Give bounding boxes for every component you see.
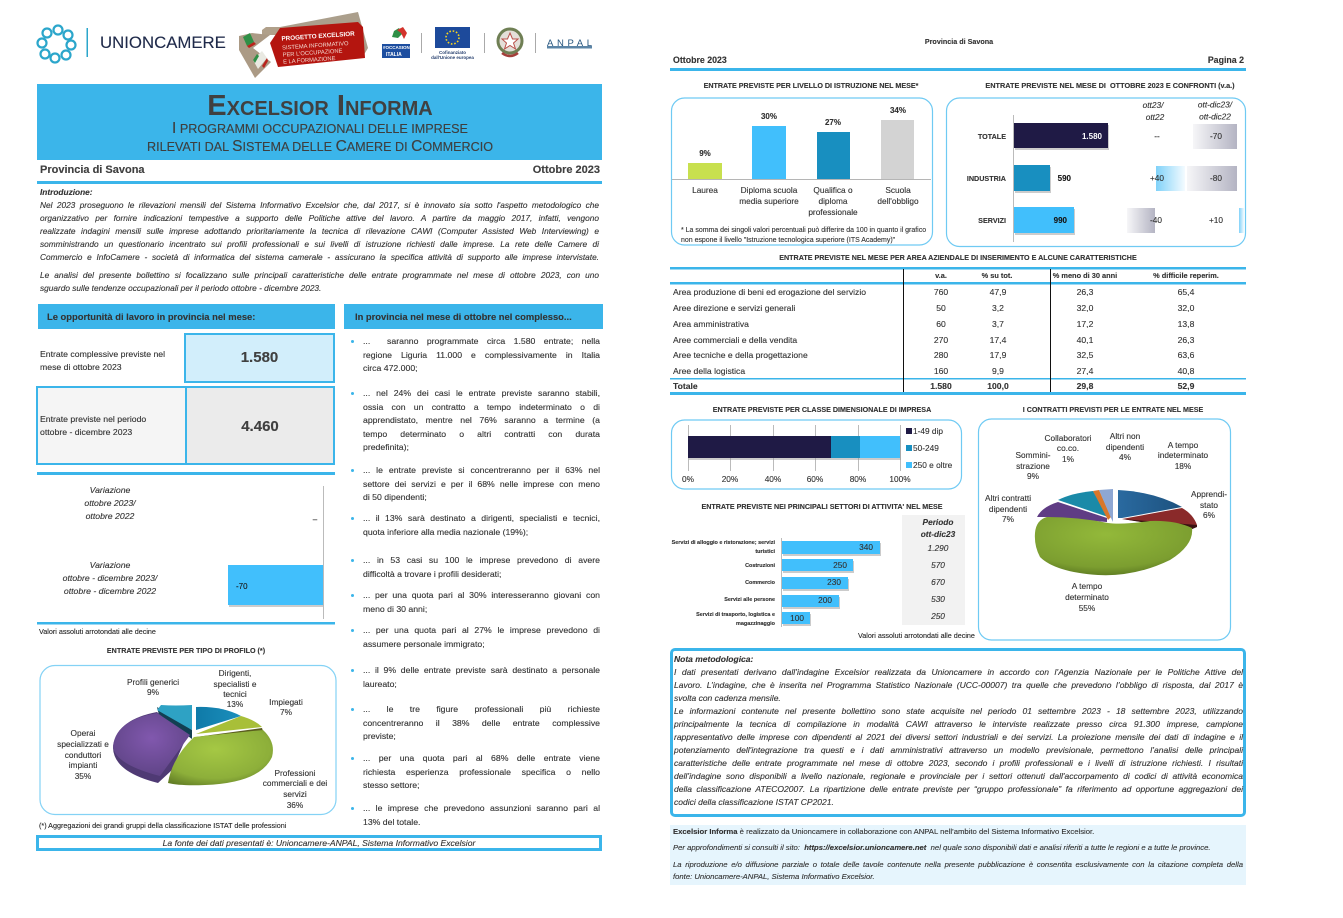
chart: entries and comparisons: +10 [1209, 215, 1223, 225]
chart: profile type pie: Dirigenti, [219, 668, 251, 678]
table: company areas: 17,2 [1077, 319, 1094, 329]
chart: education level bars: diploma [818, 196, 848, 206]
logo: Progetto Excelsior [239, 12, 368, 78]
heading: comparison chart: ENTRATE PREVISTE NEL MESE DI OTTOBRE 2023 E CONFRONTI (v.a.) [985, 81, 1235, 90]
chart: main sectors bars: Periodo [923, 517, 953, 527]
chart: entries and comparisons: -70 [1210, 131, 1222, 141]
panel: methodological note: dell’indagine sono disponibili a livello nazionale, regionale e provinciale per i settori ottenuti dall'accorpamento di codici di attività economica [674, 771, 1243, 781]
website line: Per approfondimenti si consulti il sito: https://excelsior.unioncamere.net nel quale sono disponibili dati e analisi riferiti a tutte le regioni e a tutte le province. [673, 843, 1211, 852]
table: company areas: 47,9 [990, 287, 1007, 297]
chart: profile type pie: 36% [287, 800, 304, 810]
chart: profile type pie: specializzati e [57, 739, 109, 749]
monthly entries label: Entrate complessive previste nel [40, 349, 165, 359]
chart: contracts pie: Apprendi- [1191, 489, 1227, 499]
introduction text: Introduzione: [40, 187, 93, 197]
table: company areas: 52,9 [1178, 381, 1195, 391]
reproduction notice: fonte: Unioncamere-ANPAL, Sistema Informativo Excelsior. [673, 872, 875, 881]
chart: education level bars: Scuola [885, 185, 911, 195]
chart: contracts pie: 9% [1027, 471, 1040, 481]
bullet [351, 555, 600, 579]
table: company areas: v.a. [935, 271, 947, 280]
chart: education level bars: 30% [761, 112, 777, 121]
table: company areas: Aree direzione e servizi generali [673, 303, 795, 313]
bullet: circa 472.000; [363, 363, 418, 373]
chart: entries and comparisons: -80 [1210, 173, 1222, 183]
table: company areas: 3,7 [992, 319, 1004, 329]
bullet: regione Liguria 11.000 e complessivamente in Italia [363, 350, 600, 360]
chart: contracts pie: 7% [1002, 514, 1015, 524]
table: company areas: 17,4 [990, 335, 1007, 345]
introduction text: sguardo sulle tendenze occupazionali per il periodo ottobre - dicembre 2023. [40, 283, 321, 293]
chart: contracts pie: dipendenti [989, 504, 1027, 514]
table: company areas: 270 [934, 335, 948, 345]
heading: month overview: In provincia nel mese di ottobre nel complesso... [355, 311, 572, 322]
bullet: di 50 dipendenti; [363, 492, 427, 502]
chart: education level bars: 27% [825, 118, 841, 127]
chart: main sectors bars [672, 515, 975, 640]
chart: profile type pie: 13% [227, 699, 244, 709]
table: company areas: 32,0 [1077, 303, 1094, 313]
chart: profile type pie: servizi [283, 789, 307, 799]
chart: contracts pie: stato [1200, 500, 1218, 510]
panel: methodological note: rappresentativo delle imprese con dipendenti al 2021 dei diversi settori industriali e dei servizi. La proiezione mensile dei dati di indagine e il [674, 732, 1243, 742]
chart: profile type pie: 35% [75, 771, 92, 781]
chart: entries and comparisons: ott23/ [1143, 100, 1165, 110]
panel: methodological note: potenziamento dell'integrazione tra questi e i dati amministrativi attraverso un modello previsionale, permettono l’analisi delle principali [674, 745, 1243, 755]
table: company areas [670, 267, 1246, 395]
logo: Progetto Excelsior: PER L'OCCUPAZIONE [282, 48, 343, 59]
main title: Excelsior Informa [207, 90, 433, 122]
chart: company size stacked bar: 100% [889, 474, 911, 484]
heading: contracts chart: I CONTRATTI PREVISTI PER LE ENTRATE NEL MESE [1023, 406, 1203, 414]
bullet: stesso settore; [363, 780, 420, 790]
bullet: ... in 53 casi su 100 le imprese prevedono di avere [363, 555, 600, 565]
table: company areas: 40,1 [1077, 335, 1094, 345]
chart: entries and comparisons: -- [1154, 131, 1160, 141]
subtitle [147, 120, 493, 155]
chart: main sectors bars: 100 [790, 613, 804, 623]
bullet [351, 590, 600, 614]
logo: Progetto Excelsior: E LA FORMAZIONE [283, 56, 336, 66]
introduction text: Nel 2023 proseguono le rilevazioni mensili del Sistema Informativo Excelsior che, dal 2017, si è innovato sia sotto l'aspetto metodologico che [40, 200, 599, 210]
chart: main sectors bars: Commercio [745, 580, 776, 586]
subtitle: RILEVATI DAL SISTEMA DELLE CAMERE DI COMMERCIO [147, 138, 493, 155]
chart: variations: Variazione [90, 560, 131, 570]
bullet [351, 753, 600, 790]
heading: month overview [344, 304, 603, 329]
table: company areas: 17,9 [990, 350, 1007, 360]
province and date: Ottobre 2023 [533, 164, 600, 176]
chart: education level bars: Laurea [692, 185, 718, 195]
chart: profile type pie: impianti [69, 760, 97, 770]
chart: company size stacked bar: 40% [765, 474, 782, 484]
chart: contracts pie: 6% [1203, 510, 1216, 520]
bullet: ... le entrate previste si concentreranno per il 63% nel [363, 465, 600, 475]
chart: main sectors bars: magazzinaggio [736, 621, 776, 627]
bullet: concentreranno il 38% delle entrate complessive [363, 718, 600, 728]
chart: company size stacked bar: 80% [850, 474, 867, 484]
heading: education chart: ENTRATE PREVISTE PER LIVELLO DI ISTRUZIONE NEL MESE* [704, 82, 918, 90]
chart: variations: Valori assoluti arrotondati alle decine [39, 627, 156, 636]
introduction text [40, 187, 600, 293]
bullet list [351, 336, 600, 827]
panel: methodological note: della classificazione ATECO2007. La ripartizione delle entrate previste per “gruppo professionale” fa riferimento ad opportune aggregazioni dei [674, 784, 1243, 794]
chart: contracts pie: Altri contratti [985, 493, 1031, 503]
bullet: richiesta esperienza professionale specifica o nello [363, 767, 600, 777]
chart: main sectors bars: Servizi di alloggio e ristorazione; servizi [672, 540, 775, 546]
chart: contracts pie: determinato [1065, 592, 1109, 602]
table: company areas: Aree tecniche e della progettazione [673, 350, 808, 360]
panel: methodological note: caratteristiche delle entrate programmate nel mese di ottobre 2023, secondo i profili professionali e i livelli di istruzione richiesti. I risultati [674, 758, 1243, 768]
logo: Progetto Excelsior: PROGETTO EXCELSIOR [281, 31, 355, 43]
chart: contracts pie: Collaboratori [1044, 433, 1092, 443]
chart: entries and comparisons: INDUSTRIA [967, 174, 1006, 183]
bullet [351, 665, 600, 689]
introduction text: Commercio e InfoCamere - società di informatica del sistema camerale - assicurano la specifica attività di supporto alle imprese intervistate. [40, 252, 599, 262]
chart: entries and comparisons: TOTALE [978, 132, 1006, 141]
chart: main sectors bars: 340 [859, 542, 873, 552]
chart: entries and comparisons: 990 [1054, 216, 1068, 225]
chart: education level bars: Qualifica o [813, 185, 853, 195]
chart: variations [37, 472, 335, 636]
data source box: La fonte dei dati presentati è: Unioncamere-ANPAL, Sistema Informativo Excelsior [163, 838, 475, 848]
bullet: ossia con un contratto a tempo indeterminato o di [363, 402, 600, 412]
panel: methodological note: Le informazioni contenute nel presente bollettino sono state acquisite nel periodo 01 settembre 2023 - 18 settembre 2023, utilizzando [674, 706, 1243, 716]
chart: profile type pie: Impiegati [269, 697, 303, 707]
chart: profile type pie: commerciali e dei [263, 778, 327, 788]
chart: company size stacked bar: 50-249 [913, 443, 939, 453]
introduction text: somministrando un questionario incentrato sui profili professionali e sui livelli di istruzione richiesti dalle imprese. La rete delle Camere di [40, 239, 599, 249]
bullet: apprendistato, mentre nel 76% saranno a termine (a [363, 415, 600, 425]
logo: partner institutions: ITALIA [386, 52, 402, 58]
monthly entries value: 1.580 [241, 349, 278, 366]
table: company areas: Totale [673, 381, 698, 391]
table: company areas: 63,6 [1178, 350, 1195, 360]
chart: contracts pie [978, 418, 1232, 641]
bullet: laureato; [363, 679, 397, 689]
chart: entries and comparisons: 590 [1058, 174, 1072, 183]
chart: education level bars: 34% [890, 106, 906, 115]
chart: main sectors bars: Servizi di trasporto, logistica e [696, 612, 775, 618]
panel: methodological note: Nota metodologica: [674, 654, 753, 664]
table: company areas: 27,4 [1077, 366, 1094, 376]
table: company areas: 160 [934, 366, 948, 376]
chart: profile type pie: Profili generici [127, 677, 179, 687]
title banner [37, 84, 602, 160]
panel: methodological note: I dati presentati derivano dall’indagine Excelsior realizzata da Unioncamere in accordo con l’Agenzia Nazionale per le Politiche Attive del [674, 667, 1243, 677]
reproduction notice [673, 860, 1243, 881]
table: company areas: Aree commerciali e della vendita [673, 335, 797, 345]
chart: company size stacked bar [670, 419, 962, 490]
panel: methodological note: svolta con cadenza mensile. [674, 693, 781, 703]
logo: Progetto Excelsior: SISTEMA INFORMATIVO [282, 41, 349, 52]
bullet: difficoltà a trovare i profili desiderati; [363, 569, 501, 579]
chart: education level bars: professionale [808, 207, 858, 217]
chart: variations: -70 [236, 582, 248, 591]
bullet [351, 336, 600, 373]
table: company areas: 32,0 [1178, 303, 1195, 313]
quarter entries label: ottobre - dicembre 2023 [40, 427, 132, 437]
introduction text: realizzate indagini mensili sulle imprese adottando prioritariamente la tecnica di rilevazione CAWI (Computer Assisted Web Interviewing) e [40, 226, 599, 236]
bullet: ... il 13% sarà destinato a dirigenti, specialisti e tecnici, [363, 513, 600, 523]
chart: profile type pie [39, 664, 337, 816]
monthly entries label: mese di ottobre 2023 [40, 362, 122, 372]
chart: company size stacked bar: 1-49 dip [913, 426, 943, 436]
heading: sectors chart: ENTRATE PREVISTE NEI PRINCIPALI SETTORI DI ATTIVITA' NEL MESE [701, 503, 943, 511]
bullet: settore dei servizi e per il 68% nelle imprese con meno [363, 479, 600, 489]
chart: main sectors bars: 670 [931, 577, 945, 587]
bullet: tempo determinato o altri contratti con durata [363, 429, 600, 439]
table: company areas: 9,9 [992, 366, 1004, 376]
credits line: Excelsior Informa è realizzato da Unioncamere in collaborazione con ANPAL nell’ambito del Sistema Informativo Excelsior. [673, 827, 1094, 836]
table: company areas: Aree della logistica [673, 366, 745, 376]
bullet: predefinita); [363, 442, 409, 452]
footnote: (*) Aggregazioni dei grandi gruppi della classificazione ISTAT delle professioni [39, 821, 286, 830]
chart: main sectors bars: Servizi alle persone [724, 597, 775, 603]
monthly entries label [40, 349, 165, 372]
table: company areas: Area produzione di beni ed erogazione del servizio [673, 287, 866, 297]
chart: variations: – [313, 515, 318, 524]
bullet: ... nel 24% dei casi le entrate previste saranno stabili, [363, 388, 600, 398]
province and date [37, 163, 602, 184]
chart: main sectors bars: turistici [755, 549, 775, 555]
table: company areas: 100,0 [987, 381, 1009, 391]
logo: partner institutions: ANPAL [547, 38, 592, 49]
chart: main sectors bars: 250 [833, 560, 847, 570]
panel heading [38, 304, 335, 329]
panel: methodological note: Lavoro. L’indagine, che è inserita nel Programma Statistico Nazionale (UCC-00007) tra quelle che prevedono l’obbligo di risposta, dal 2017 è [674, 680, 1243, 690]
bullet [351, 388, 600, 452]
table: company areas: 29,8 [1077, 381, 1094, 391]
quarter entries value: 4.460 [241, 418, 279, 435]
chart: profile type pie: Professioni [274, 768, 316, 778]
chart: variations: ottobre - dicembre 2022 [64, 586, 156, 596]
chart: contracts pie: 55% [1079, 603, 1096, 613]
bullet: previste; [363, 731, 396, 741]
chart: contracts pie: 18% [1175, 461, 1192, 471]
panel: methodological note [670, 648, 1246, 817]
quarter entries value [185, 388, 333, 463]
heading: company size chart: ENTRATE PREVISTE PER CLASSE DIMENSIONALE DI IMPRESA [713, 406, 931, 414]
chart: education level bars: dell'obbligo [877, 196, 919, 206]
panel: credits [670, 825, 1246, 885]
quarter entries box [36, 386, 335, 465]
bullet [351, 465, 600, 502]
table: company areas: % su tot. [982, 271, 1012, 280]
chart: contracts pie: 1% [1062, 454, 1075, 464]
chart: profile type pie: 7% [280, 707, 293, 717]
monthly entries value [184, 333, 335, 383]
chart: main sectors bars: 1.290 [928, 543, 949, 553]
panel heading: Le opportunità di lavoro in provincia nel mese: [47, 311, 255, 322]
chart: entries and comparisons: 1.580 [1082, 132, 1103, 141]
chart: education level bars: media superiore [739, 196, 799, 206]
bullet: ... le tre figure professionali più richieste [363, 704, 600, 714]
chart: contracts pie: strazione [1016, 461, 1050, 471]
chart: entries and comparisons: SERVIZI [978, 216, 1006, 225]
bullet: 13% del totale. [363, 817, 420, 827]
table: company areas: 40,8 [1178, 366, 1195, 376]
introduction text: organizzativo per fornire indicazioni tempestive a supporto delle Politiche attive del lavoro. A partire da maggio 2017, infatti, vengono [40, 213, 599, 223]
bullet [351, 625, 600, 649]
bullet: ... saranno programmate circa 1.580 entrate; nella [363, 336, 600, 346]
page 2 header: Pagina 2 [1208, 55, 1244, 65]
heading: profile type chart: ENTRATE PREVISTE PER TIPO DI PROFILO (*) [107, 647, 265, 655]
province and date: Provincia di Savona [40, 164, 145, 176]
table: company areas: 60 [936, 319, 946, 329]
chart: entries and comparisons: -40 [1150, 215, 1162, 225]
table: company areas: 65,4 [1178, 287, 1195, 297]
chart: profile type pie: conduttori [65, 750, 101, 760]
chart: entries and comparisons: +40 [1150, 173, 1164, 183]
chart: contracts pie: Altri non [1110, 431, 1141, 441]
table: company areas: % meno di 30 anni [1053, 271, 1117, 280]
chart: education level bars: non espone il livello "Istruzione tecnologica superiore (ITS Academy)" [681, 237, 896, 244]
bullet [351, 803, 600, 827]
heading: company area table: ENTRATE PREVISTE NEL MESE PER AREA AZIENDALE DI INSERIMENTO E ALCUNE CARATTERISTICHE [779, 254, 1137, 262]
chart: contracts pie: indeterminato [1158, 450, 1209, 460]
table: company areas: 760 [934, 287, 948, 297]
table: company areas: 280 [934, 350, 948, 360]
bullet [351, 513, 600, 537]
bullet: assumere personale immigrato; [363, 639, 485, 649]
logo: partner institutions [382, 27, 592, 60]
bullet: meno di 30 anni; [363, 604, 427, 614]
panel: job opportunities [36, 304, 335, 465]
chart: company size stacked bar: 60% [807, 474, 824, 484]
chart: profile type pie: 9% [147, 687, 160, 697]
page 2 province heading: Provincia di Savona [925, 37, 993, 46]
chart: company size stacked bar: 250 e oltre [913, 460, 953, 470]
chart: main sectors bars: 570 [931, 560, 945, 570]
chart: main sectors bars: Costruzioni [745, 563, 775, 569]
chart: company size stacked bar: 0% [682, 474, 695, 484]
chart: profile type pie: Operai [71, 728, 96, 738]
chart: main sectors bars: Valori assoluti arrotondati alle decine [858, 631, 975, 640]
chart: contracts pie: A tempo [1072, 581, 1103, 591]
chart: entries and comparisons: ott22 [1146, 112, 1165, 122]
chart: profile type pie: tecnici [223, 689, 247, 699]
table: company areas: 50 [936, 303, 946, 313]
chart: main sectors bars: 230 [827, 577, 841, 587]
chart: education level bars: 9% [699, 149, 711, 158]
table: company areas: 3,2 [992, 303, 1004, 313]
reproduction notice: La riproduzione e/o diffusione parziale o totale delle tavole contenute nella presente pubblicazione è consentita esclusivamente con la citazione completa della [673, 860, 1243, 869]
bullet: ... per una quota pari al 30% interesseranno giovani con [363, 590, 600, 600]
page 2 header [670, 54, 1246, 71]
chart: company size stacked bar: 20% [722, 474, 739, 484]
chart: main sectors bars: 250 [930, 611, 945, 621]
chart: entries and comparisons: ott-dic22 [1199, 112, 1231, 122]
logo: Unioncamere: UNIONCAMERE [100, 33, 226, 52]
table: company areas: Area amministrativa [673, 319, 749, 329]
bullet: quota inferiore alla media nazionale (19%); [363, 527, 528, 537]
chart: contracts pie: A tempo [1168, 440, 1199, 450]
logo: partner institutions: #OCCASIONE [383, 45, 413, 50]
panel: methodological note: principalmente la tecnica di compilazione in modalità CAWI attraverso le interviste realizzate presso circa 91.300 imprese, campione [674, 719, 1243, 729]
table: company areas: 13,8 [1178, 319, 1195, 329]
chart: education level bars: * La somma dei singoli valori percentuali può differire da 100 in quanto il grafico [681, 227, 926, 234]
introduction text: Le analisi del presente bollettino si focalizzano sulle principali caratteristiche delle entrate programmate nel mese di ottobre 2023, con uno [40, 270, 599, 280]
page 2 header: Ottobre 2023 [673, 55, 727, 65]
logo: Unioncamere [36, 24, 226, 64]
quarter entries label [40, 414, 146, 437]
chart: variations: ottobre 2023/ [84, 498, 137, 508]
chart: contracts pie: 4% [1119, 452, 1132, 462]
chart: entries and comparisons: ott-dic23/ [1198, 100, 1234, 110]
bullet: ... per una quota pari al 27% le imprese prevedono di [363, 625, 600, 635]
chart: variations: ottobre - dicembre 2023/ [63, 573, 159, 583]
table: company areas: 26,3 [1077, 287, 1094, 297]
table: company areas: 32,5 [1077, 350, 1094, 360]
chart: variations: ottobre 2022 [86, 511, 135, 521]
bullet [351, 704, 600, 741]
chart: main sectors bars: ott-dic23 [921, 529, 956, 539]
data source box [36, 835, 602, 851]
table: company areas: 26,3 [1178, 335, 1195, 345]
subtitle: I PROGRAMMI OCCUPAZIONALI DELLE IMPRESE [172, 120, 468, 137]
panel: methodological note: codici della classificazione ISTAT CP2021. [674, 797, 834, 807]
logo: partner institutions: dall'Unione europea [431, 55, 474, 60]
chart: education level bars: Diploma scuola [741, 185, 798, 195]
chart: entries and comparisons [946, 97, 1246, 248]
bullet: ... il 9% delle entrate previste sarà destinato a personale [363, 665, 600, 675]
chart: education level bars [670, 97, 934, 246]
chart: variations: Variazione [90, 485, 131, 495]
table: company areas: 1.580 [930, 381, 952, 391]
chart: main sectors bars: 530 [931, 594, 945, 604]
quarter entries label: Entrate previste nel periodo [40, 414, 146, 424]
logo: partner institutions: Cofinanziato [439, 50, 466, 55]
chart: main sectors bars: 200 [818, 595, 832, 605]
bullet: ... le imprese che prevedono assunzioni saranno pari al [363, 803, 600, 813]
chart: profile type pie: specialisti e [214, 679, 257, 689]
chart: contracts pie: dipendenti [1106, 442, 1144, 452]
bullet: ... per una quota pari al 68% delle entrate viene [363, 753, 600, 763]
chart: contracts pie: co.co. [1057, 443, 1079, 453]
table: company areas: % difficile reperim. [1153, 271, 1219, 280]
chart: contracts pie: Sommini- [1015, 450, 1051, 460]
